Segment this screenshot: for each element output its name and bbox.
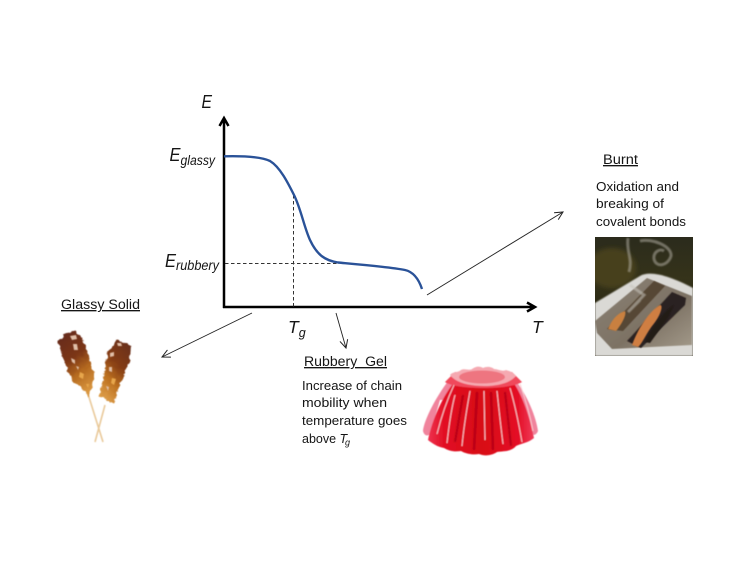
text: rubbery gel description: Increase of chain: [302, 379, 402, 393]
icon: burnt toast in toaster: [588, 237, 693, 356]
y axis: [220, 118, 228, 308]
icon: red jelly: [423, 367, 538, 455]
label: E rubbery: [165, 250, 220, 273]
text: rubbery gel description: [302, 379, 407, 448]
heading: rubbery gel: Rubbery Gel: [304, 354, 387, 369]
x axis: [223, 302, 535, 312]
label: E glassy: glassy: [180, 153, 216, 168]
text: rubbery gel description: temperature goes: [302, 414, 407, 428]
text: rubbery gel description: above T: [302, 432, 349, 446]
arrow: to glassy solid: [162, 313, 252, 357]
arrow: to burnt: [427, 212, 563, 295]
text: rubbery gel description: mobility when: [302, 396, 387, 410]
text: burnt description: breaking of: [596, 197, 665, 211]
text: burnt description: covalent bonds: [596, 215, 686, 229]
text: burnt description: Oxidation and: [596, 180, 679, 194]
heading: burnt: Burnt: [603, 152, 638, 167]
text: rubbery gel description: g: [345, 438, 350, 448]
label: E rubbery: rubbery: [176, 258, 220, 273]
label: E glassy: E: [170, 144, 181, 165]
label: T g: T: [288, 317, 299, 337]
dashed guide lines: [225, 195, 337, 307]
arrow: to rubbery gel: [336, 313, 346, 348]
text: burnt description: [596, 180, 686, 229]
chart: modulus versus temperature: [165, 92, 544, 340]
label: E glassy: [170, 144, 216, 168]
label: T g: g: [299, 326, 306, 340]
label: E rubbery: E: [165, 250, 177, 271]
heading: glassy solid: Glassy Solid: [61, 297, 140, 312]
modulus curve: [224, 156, 422, 289]
label: T axis: T: [532, 317, 544, 337]
label: E axis: E: [202, 92, 213, 112]
icon: rock candy sticks: [58, 331, 131, 442]
